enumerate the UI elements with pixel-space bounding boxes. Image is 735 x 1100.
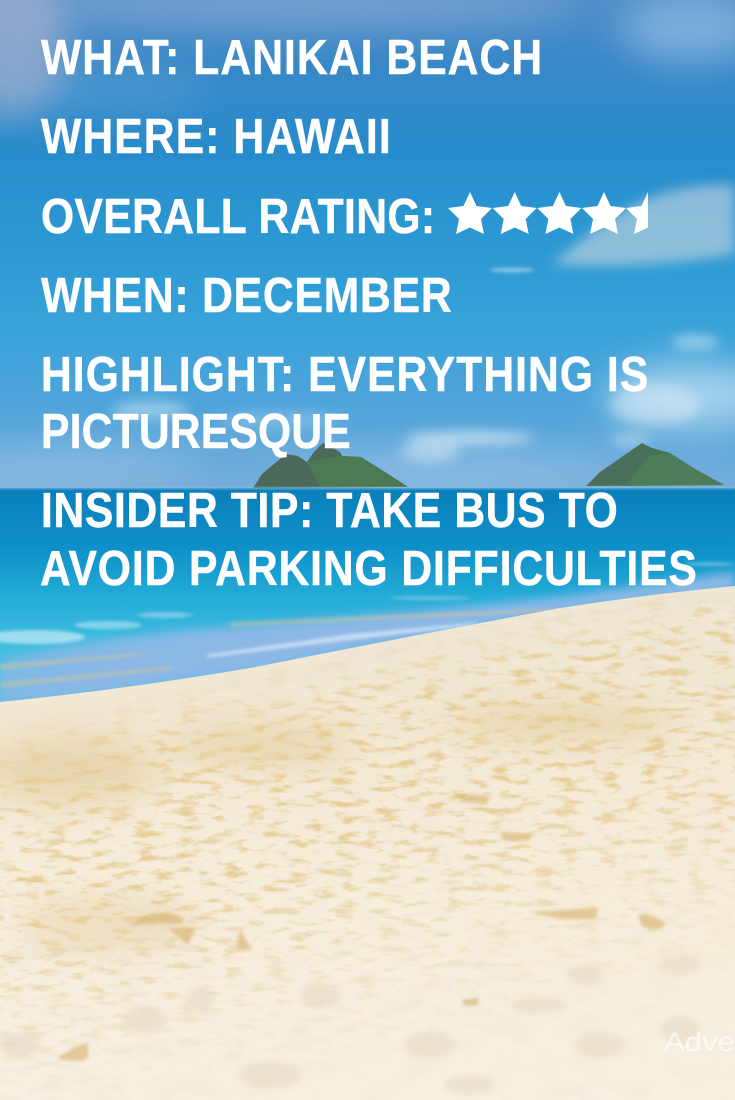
text: insider tip [40, 482, 697, 596]
text: what: WHAT: LANIKAI BEACH [41, 29, 542, 85]
text: highlight: PICTURESQUE [41, 403, 351, 459]
icon: left island [253, 443, 408, 488]
icon: right island [586, 443, 724, 486]
text: overall rating: OVERALL RATING: [41, 188, 435, 244]
background: sky with clouds [0, 0, 735, 492]
text: where: WHERE: HAWAII [41, 108, 391, 164]
text: highlight [41, 346, 648, 459]
text: highlight: HIGHLIGHT: EVERYTHING IS [41, 346, 648, 402]
background: ocean [0, 487, 735, 708]
icon: rating stars, four and a half [448, 192, 648, 234]
text: when: WHEN: DECEMBER [41, 267, 452, 323]
text: insider tip: INSIDER TIP: TAKE BUS TO [41, 482, 618, 538]
text: insider tip: AVOID PARKING DIFFICULTIES [40, 540, 697, 596]
text: watermark: Adve [664, 1027, 735, 1057]
background: sandy beach with footprints [0, 580, 735, 1100]
